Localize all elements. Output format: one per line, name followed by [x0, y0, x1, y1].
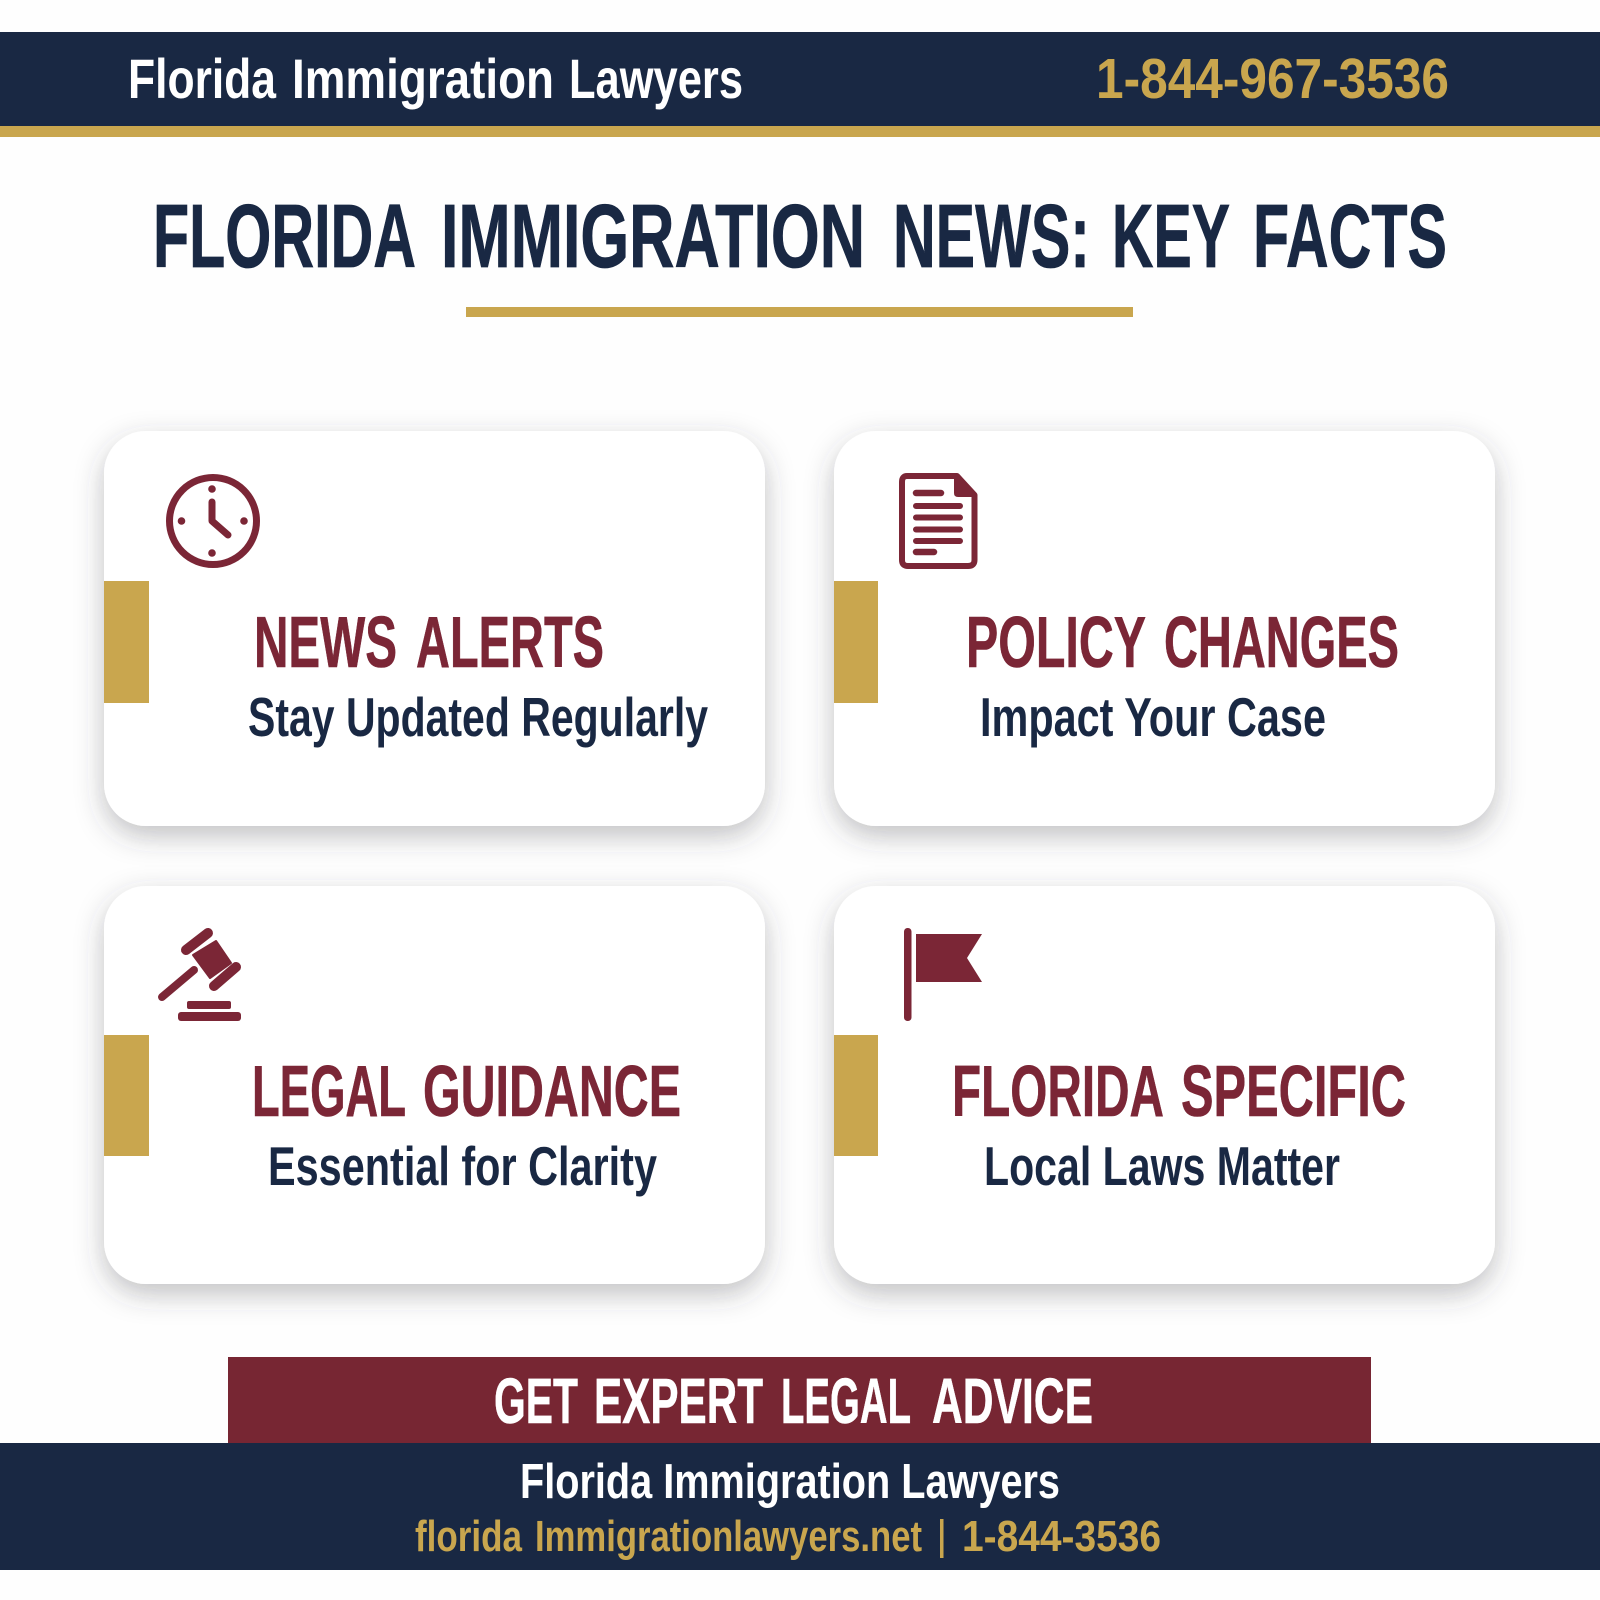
header firm name: Florida	[128, 47, 277, 110]
icon: clock	[170, 478, 256, 564]
heading: POLICY	[966, 603, 1146, 683]
subheading: Impact Your Case	[980, 686, 1326, 748]
heading: FLORIDA	[952, 1052, 1164, 1132]
footer firm name: Florida Immigration Lawyers	[520, 1455, 1060, 1509]
footer contact line: florida	[415, 1512, 522, 1561]
header firm name: Lawyers	[569, 47, 743, 110]
header bar	[0, 32, 1600, 137]
heading	[254, 603, 604, 683]
footer bar	[0, 1443, 1600, 1570]
icon: document	[902, 476, 974, 566]
title: KEY	[1112, 187, 1230, 287]
icon: flag	[904, 928, 982, 1021]
heading: ALERTS	[416, 603, 604, 683]
panel: news alerts	[104, 431, 765, 826]
title: NEWS:	[893, 187, 1090, 287]
call to action banner	[228, 1357, 1371, 1444]
subheading: Local Laws Matter	[984, 1135, 1340, 1197]
heading: SPECIFIC	[1181, 1052, 1406, 1132]
heading	[966, 603, 1399, 683]
subheading: Essential for Clarity	[268, 1135, 657, 1197]
gold accent	[104, 581, 149, 703]
title: FACTS	[1253, 187, 1447, 287]
footer contact line: 1-844-3536	[962, 1512, 1161, 1561]
title	[153, 187, 1447, 287]
gold accent	[834, 1035, 878, 1156]
heading	[252, 1052, 681, 1132]
footer contact line: Immigrationlawyers.net	[535, 1512, 922, 1561]
call to action text	[494, 1365, 1093, 1437]
panel: policy changes	[834, 431, 1495, 826]
title underline	[466, 307, 1133, 317]
call to action text: GET	[494, 1365, 578, 1437]
footer contact line	[415, 1512, 1161, 1561]
icon: gavel	[162, 933, 241, 1021]
title: FLORIDA	[153, 187, 416, 287]
header phone number: 1-844-967-3536	[1096, 47, 1449, 111]
call to action text: ADVICE	[932, 1365, 1093, 1437]
heading: NEWS	[254, 603, 397, 683]
heading: LEGAL	[252, 1052, 406, 1132]
gold accent	[834, 581, 878, 703]
heading: CHANGES	[1164, 603, 1399, 683]
call to action text: LEGAL	[781, 1365, 911, 1437]
title: IMMIGRATION	[441, 187, 865, 287]
panel: florida specific	[834, 886, 1495, 1284]
panel: legal guidance	[104, 886, 765, 1284]
gold accent	[104, 1035, 149, 1156]
heading: GUIDANCE	[423, 1052, 681, 1132]
call to action text: EXPERT	[594, 1365, 763, 1437]
subheading: Stay Updated Regularly	[248, 686, 708, 748]
header firm name: Immigration	[292, 47, 554, 110]
header firm name	[128, 47, 743, 110]
